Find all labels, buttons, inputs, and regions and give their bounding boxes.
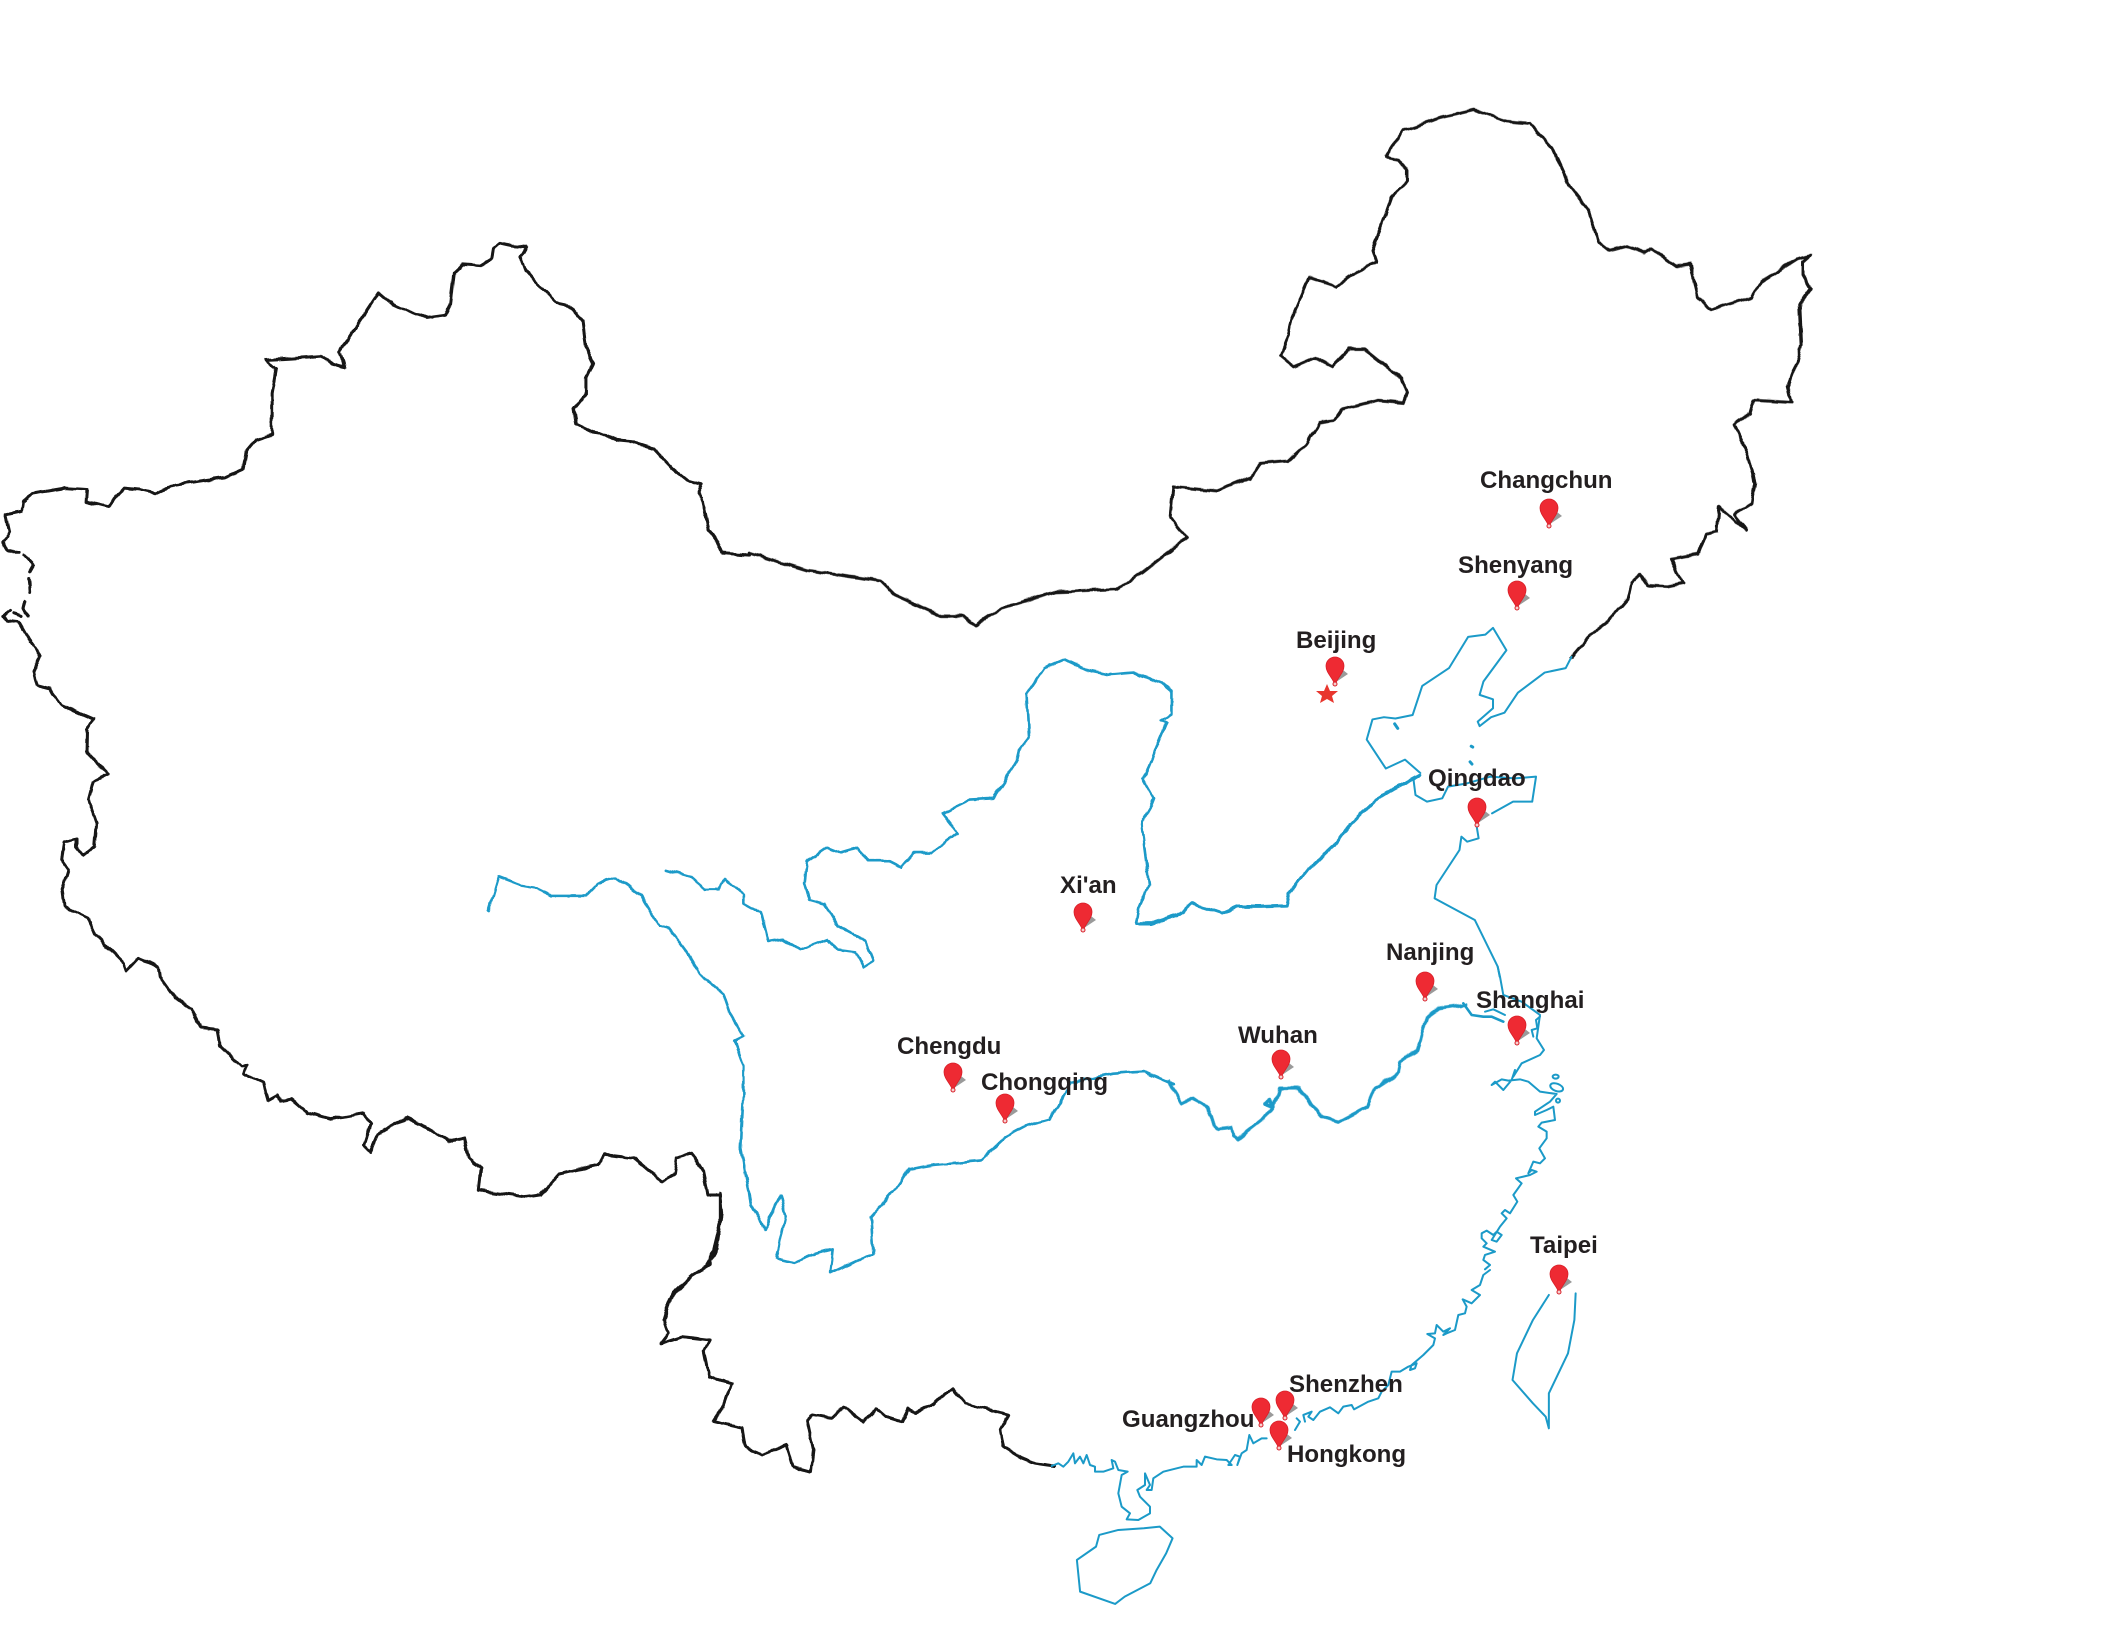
city: Beijing: [1296, 627, 1376, 686]
city: Chongqing: Chongqing: [981, 1069, 1108, 1096]
city: Hongkong: Hongkong: [1287, 1441, 1406, 1468]
land border: black outline: [2, 110, 1811, 1472]
city: Taipei: Taipei: [1530, 1232, 1598, 1259]
city: Shenzhen: [1276, 1371, 1403, 1420]
city: Chongqing: [981, 1069, 1108, 1123]
capital star: Beijing: [1316, 684, 1338, 703]
city: Shenyang: Shenyang: [1458, 552, 1573, 579]
city: Nanjing: Nanjing: [1386, 939, 1474, 966]
city: Shenyang: [1458, 552, 1573, 610]
city: Shenzhen: Shenzhen: [1289, 1371, 1403, 1398]
city: Hongkong: [1270, 1421, 1406, 1468]
city: Shanghai: [1476, 987, 1584, 1045]
Yangtze River: [488, 876, 1465, 1273]
island: Taiwan: [1513, 1293, 1576, 1428]
city: Beijing: Beijing: [1296, 627, 1376, 654]
city: Qingdao: Qingdao: [1428, 765, 1526, 792]
city: Wuhan: Wuhan: [1238, 1022, 1318, 1049]
city: Changchun: Changchun: [1480, 467, 1613, 494]
island: Hainan: [1077, 1527, 1173, 1604]
coastline: [1052, 628, 1571, 1520]
city: Qingdao: [1428, 765, 1526, 827]
city: Wuhan: [1238, 1022, 1318, 1079]
city: Xi'an: Xi'an: [1060, 872, 1117, 899]
city: Taipei: [1530, 1232, 1598, 1294]
city: Nanjing: [1386, 939, 1474, 1001]
city: Chengdu: Chengdu: [897, 1033, 1001, 1060]
city: Guangzhou: [1122, 1398, 1274, 1433]
city: Chengdu: [897, 1033, 1001, 1092]
city: Xi'an: [1060, 872, 1117, 932]
city: Shanghai: Shanghai: [1476, 987, 1584, 1014]
city: Guangzhou: Guangzhou: [1122, 1406, 1254, 1433]
Yellow River: [667, 660, 1419, 967]
city: Changchun: [1480, 467, 1613, 528]
